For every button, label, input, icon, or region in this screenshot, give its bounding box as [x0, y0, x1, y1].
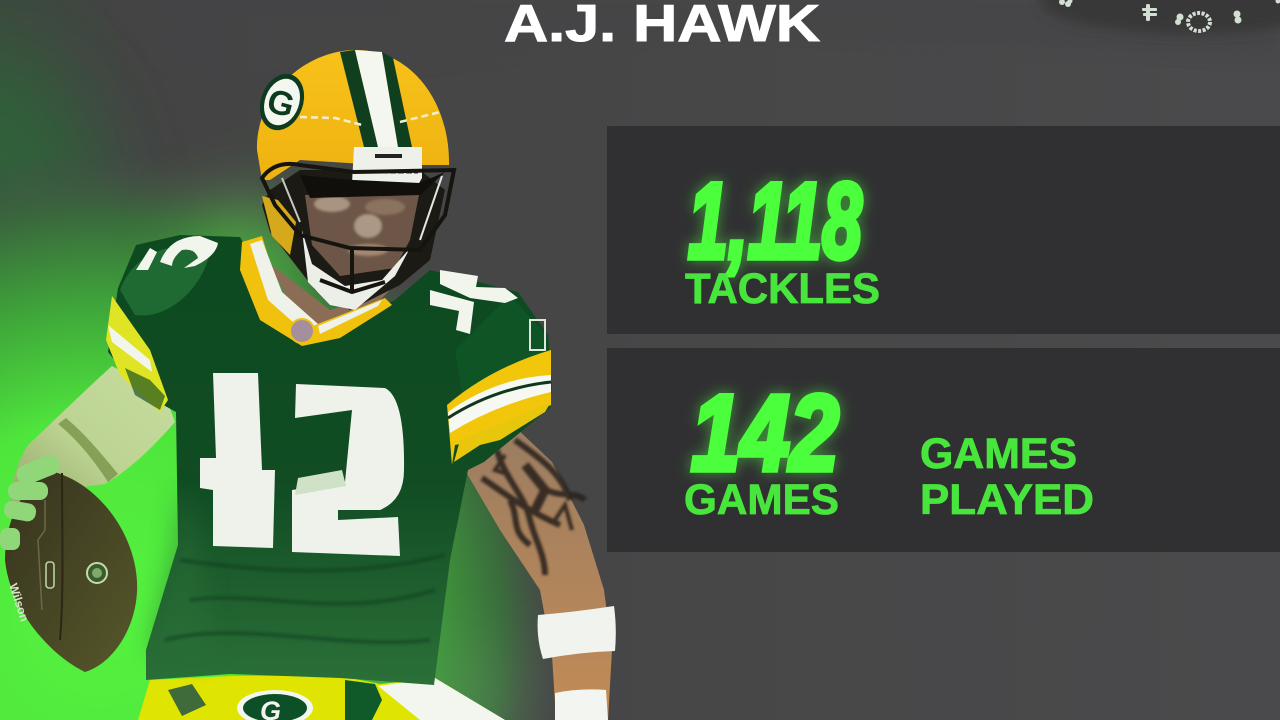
collar badge: [290, 319, 314, 343]
helmet logo: G: [263, 82, 298, 126]
jersey shoulder number right: [430, 270, 518, 334]
hand on football: [0, 452, 62, 550]
helmet logo: [252, 68, 312, 136]
stat number: games: 142: [691, 372, 839, 493]
stat number: tackles: 1,118: [688, 160, 862, 281]
face: [305, 190, 420, 276]
description: games played: [920, 430, 1094, 524]
panel: tackles: [607, 126, 1280, 334]
pants logo: [237, 690, 313, 720]
description: games played: GAMES: [920, 430, 1077, 478]
neck and collar: [240, 236, 392, 346]
sleeve patch: [530, 320, 545, 350]
sleeve stripes left: [106, 296, 168, 412]
description: games played: PLAYED: [920, 476, 1094, 524]
helmet bumper: [352, 147, 422, 185]
jersey number 12: [200, 373, 404, 556]
panel: games: [607, 348, 1280, 552]
wristband lower: [555, 689, 608, 720]
facemask: [262, 164, 454, 292]
chin strap: [302, 230, 410, 310]
sleeve stripes right: [447, 350, 551, 465]
wristband upper: [538, 606, 616, 659]
football: [5, 470, 137, 672]
top-right confetti remnant: [1040, 0, 1280, 34]
stat label: games: GAMES: [684, 476, 839, 524]
player illustration: [0, 50, 616, 720]
left arm: [10, 366, 175, 510]
right arm with tattoo: [466, 424, 616, 720]
helmet: [252, 50, 454, 310]
jersey shoulder number left: [136, 236, 218, 270]
pants: [138, 676, 505, 720]
jersey: [106, 235, 552, 685]
football: Wilson: [6, 582, 32, 623]
helmet stripes: [340, 50, 412, 147]
stat label: tackles: TACKLES: [685, 265, 880, 313]
